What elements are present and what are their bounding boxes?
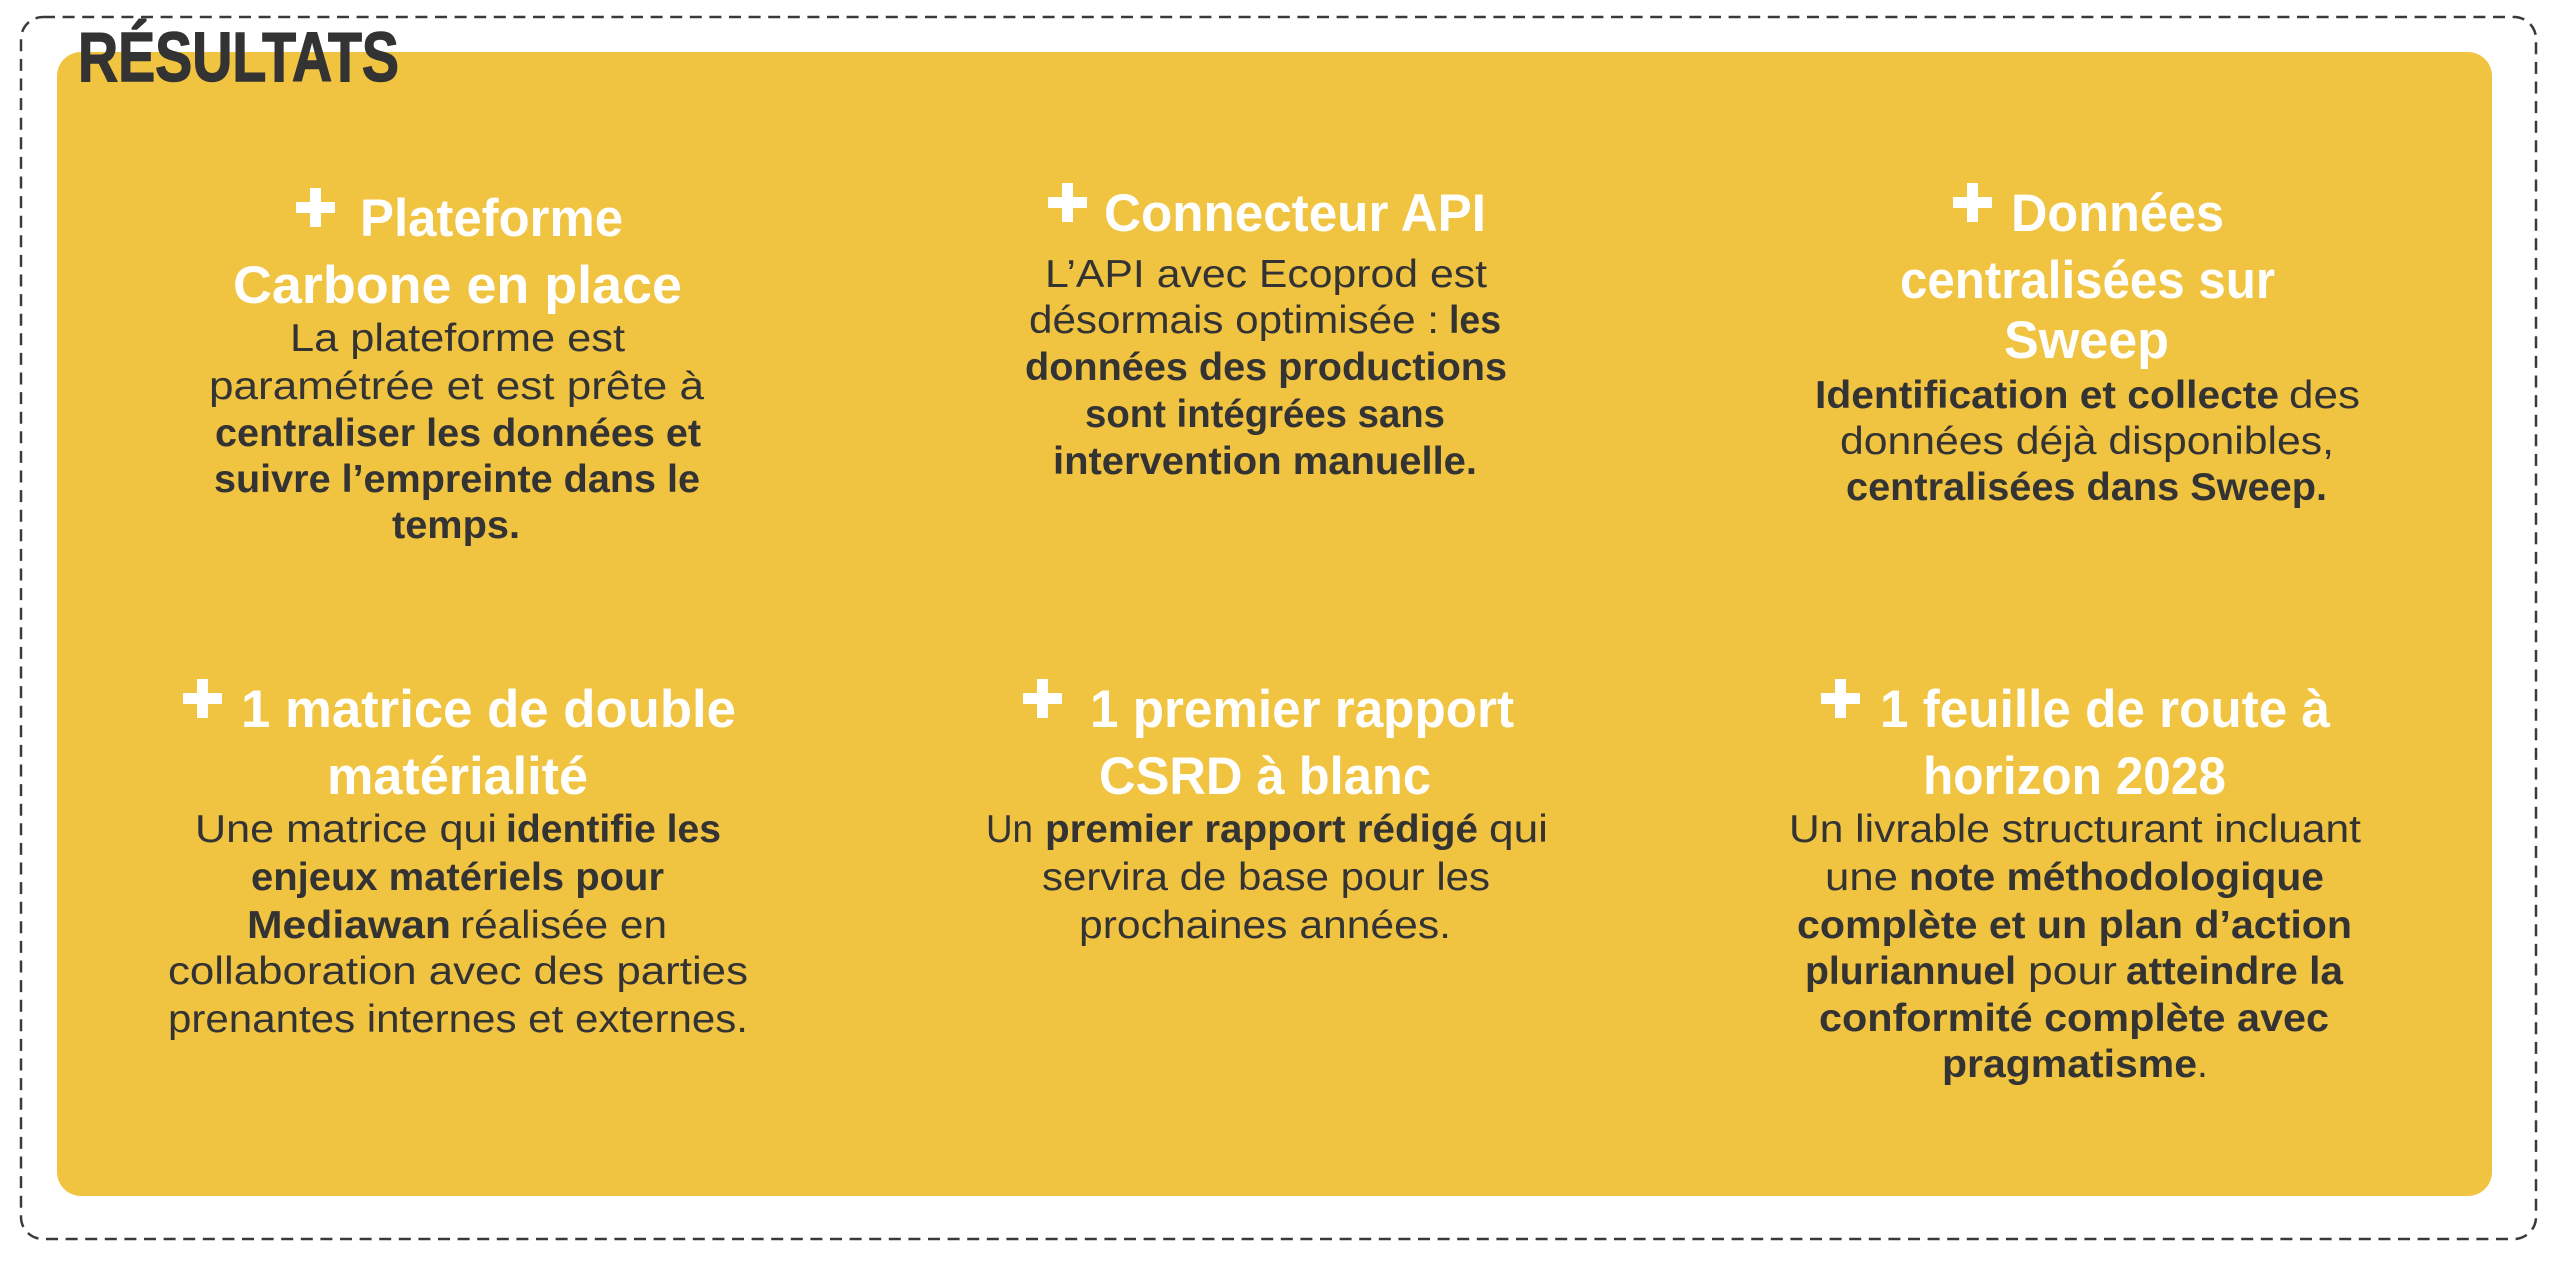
card text: feuille de route: une	[1825, 856, 1898, 899]
card title: connecteur API: Connecteur API	[1104, 184, 1486, 243]
card text: données centralisées: Identification et collecte	[1815, 374, 2279, 417]
card text: connecteur API: données des productions	[1025, 346, 1507, 389]
card title: plateforme carbone en place: Plateforme	[360, 189, 623, 248]
card text: feuille de route: conformité complète avec	[1819, 997, 2329, 1040]
card text: connecteur API: L’API avec Ecoprod est	[1045, 253, 1487, 296]
card text: matrice: enjeux matériels pour	[251, 856, 664, 899]
card text: feuille de route: complète et un plan d’action	[1797, 904, 2352, 947]
card text: feuille de route: Un livrable structurant incluant	[1789, 808, 2361, 851]
card title: premier rapport CSRD: 1 premier rapport	[1090, 680, 1514, 739]
icon: plus	[1953, 183, 1992, 222]
card text: connecteur API: les	[1449, 299, 1501, 342]
icon: plus	[183, 679, 222, 718]
card title: matrice de double matérialité	[241, 680, 736, 806]
card text: feuille de route: note méthodologique	[1909, 856, 2324, 899]
card text: matrice: prenantes internes et externes.	[168, 998, 748, 1041]
heading: résultats: RÉSULTATS	[78, 18, 399, 96]
card text: premier rapport: prochaines années.	[1079, 904, 1451, 947]
card text: plateforme carbone: suivre l’empreinte dans le	[214, 458, 700, 501]
card text: plateforme carbone: La plateforme est	[290, 317, 625, 360]
card text: premier rapport: qui	[1489, 808, 1548, 851]
icon: plus	[1821, 679, 1860, 718]
card text: premier rapport: servira de base pour les	[1042, 856, 1490, 899]
card text: matrice	[168, 808, 748, 1041]
card title: données centralisées sur sweep: Sweep	[2004, 311, 2169, 370]
card title: données centralisées sur sweep: centralisées sur	[1900, 251, 2275, 310]
card title: premier rapport CSRD	[1090, 680, 1514, 806]
card text: données centralisées: centralisées dans Sweep.	[1846, 466, 2327, 509]
card text: feuille de route: .	[2197, 1043, 2208, 1086]
card title: matrice de double matérialité: matérialité	[327, 747, 588, 806]
card title: feuille de route: horizon 2028	[1923, 747, 2226, 806]
card text: connecteur API: désormais optimisée :	[1029, 299, 1439, 342]
card text: matrice: identifie les	[506, 808, 721, 851]
card title: plateforme carbone en place: Carbone en place	[233, 256, 682, 315]
card text: matrice: Une matrice qui	[195, 808, 497, 851]
card text: plateforme carbone: paramétrée et est prête à	[209, 365, 704, 408]
card text: premier rapport: premier rapport rédigé	[1045, 808, 1478, 851]
card title: plateforme carbone en place	[233, 189, 682, 315]
card title: feuille de route	[1880, 680, 2331, 806]
panel: feuille de route	[1789, 679, 2361, 1086]
card text: données centralisées: données déjà disponibles,	[1840, 420, 2334, 463]
card text: plateforme carbone: centraliser les données et	[215, 412, 701, 455]
card text: premier rapport: Un	[986, 808, 1033, 851]
icon: plus	[296, 188, 335, 227]
card text: feuille de route: pragmatisme	[1942, 1043, 2197, 1086]
card text: connecteur API: sont intégrées sans	[1085, 393, 1445, 436]
card title: feuille de route: 1 feuille de route à	[1880, 680, 2331, 739]
panel: matrice de double matérialité	[168, 679, 748, 1041]
card title: matrice de double matérialité: 1 matrice de double	[241, 680, 736, 739]
icon: plus	[1048, 183, 1087, 222]
panel: connecteur API	[1025, 183, 1507, 483]
card text: données centralisées	[1815, 374, 2360, 509]
card title: premier rapport CSRD: CSRD à blanc	[1099, 747, 1431, 806]
card title: données centralisées sur sweep: Données	[2011, 184, 2224, 243]
panel: premier rapport CSRD	[986, 679, 1548, 947]
card text: feuille de route	[1789, 808, 2361, 1086]
card text: matrice: réalisée en	[460, 904, 667, 947]
card text: premier rapport	[986, 808, 1548, 947]
icon: plus	[1023, 679, 1062, 718]
card text: plateforme carbone	[209, 317, 704, 547]
card text: feuille de route: pour	[2028, 950, 2117, 993]
card text: plateforme carbone: temps.	[392, 504, 520, 547]
card text: connecteur API: intervention manuelle.	[1053, 440, 1477, 483]
card text: connecteur API	[1025, 253, 1507, 483]
card text: feuille de route: atteindre la	[2126, 950, 2343, 993]
card title: données centralisées sur sweep	[1900, 184, 2275, 370]
panel: plateforme carbone	[209, 188, 704, 547]
card text: matrice: Mediawan	[247, 904, 451, 947]
card text: matrice: collaboration avec des parties	[168, 950, 748, 993]
panel: données centralisées	[1815, 183, 2360, 509]
card text: données centralisées: des	[2289, 374, 2360, 417]
card text: feuille de route: pluriannuel	[1805, 950, 2016, 993]
